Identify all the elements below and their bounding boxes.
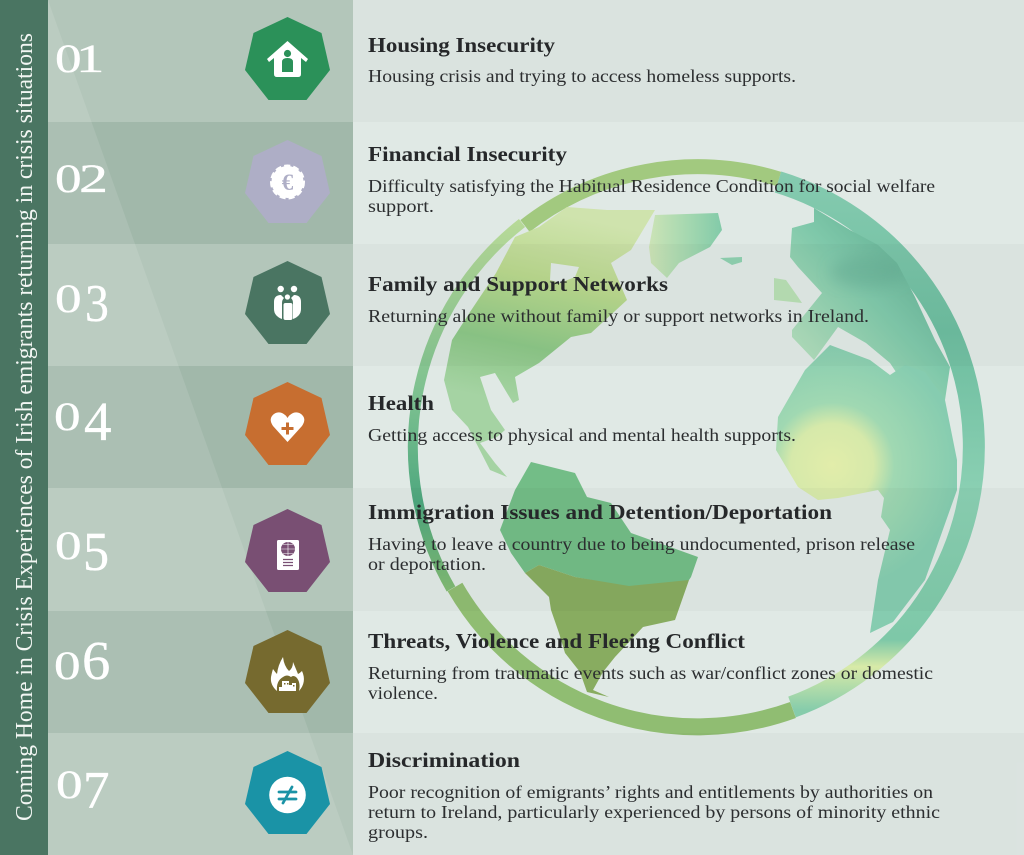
row 04: number xyxy=(54,391,112,452)
panel: left number column xyxy=(48,0,353,855)
globe ring: top arc xyxy=(525,167,779,226)
sidebar title xyxy=(0,0,48,855)
globe ring: bottom arc xyxy=(455,587,793,727)
row 01: number: 0 xyxy=(55,37,82,81)
sidebar title: Coming Home in Crisis Experiences of Irish emigrants returning in crisis situations xyxy=(12,33,38,821)
row 07: text xyxy=(368,748,940,842)
row 04: number: 4 xyxy=(84,391,112,452)
row 02: number: 0 xyxy=(55,157,82,201)
row 07: text: Poor recognition of emigrants’ rights and entitlements by authorities on xyxy=(368,782,933,802)
globe ring: right arc xyxy=(778,182,974,707)
island: Iceland xyxy=(720,257,742,265)
row 05: number: 5 xyxy=(83,521,109,582)
row 03: number: 0 xyxy=(55,277,82,321)
row 04: number: 0 xyxy=(54,395,81,439)
row 07: number: 0 xyxy=(56,763,83,807)
row 01: text: Housing Insecurity xyxy=(368,33,556,57)
row 02: icon financial xyxy=(245,140,330,223)
Hudson Bay xyxy=(550,263,579,283)
row 07: text: Discrimination xyxy=(368,748,520,772)
continent: Greenland xyxy=(649,213,722,278)
row 01: number: 1 xyxy=(76,36,104,81)
row 01: text xyxy=(368,33,796,86)
row 07: text: groups. xyxy=(368,822,428,842)
row 05: text: Having to leave a country due to being undocumented, prison release xyxy=(368,534,915,554)
row 05: text: Immigration Issues and Detention/Deportation xyxy=(368,500,832,524)
row 04: text xyxy=(368,391,796,445)
globe watercolor illustration xyxy=(413,167,974,727)
panel: right description background xyxy=(353,0,1024,855)
row 02: text xyxy=(368,142,935,216)
row 07: number: 7 xyxy=(83,762,110,820)
row 04: icon health xyxy=(245,382,330,465)
row 02: icon financial: € xyxy=(282,170,294,195)
row 03: icon family xyxy=(245,261,330,344)
continent: Eurasia xyxy=(790,208,950,400)
row 07: icon discrimination xyxy=(245,751,330,834)
row 06: text: Threats, Violence and Fleeing Conflict xyxy=(368,629,745,653)
row 06: text xyxy=(368,629,933,703)
row 05: icon immigration xyxy=(245,509,330,592)
row 03: text xyxy=(368,272,869,326)
row 02: number: 2 xyxy=(79,157,108,201)
panel: shaded bands for odd rows xyxy=(353,0,1024,855)
row 06: text: violence. xyxy=(368,683,438,703)
row 03: text: Returning alone without family or support networks in Ireland. xyxy=(368,306,869,326)
row 06: text: Returning from traumatic events such as war/conflict zones or domestic xyxy=(368,663,933,683)
row 02: text: Difficulty satisfying the Habitual Residence Condition for social welfare xyxy=(368,176,935,196)
row 07: number xyxy=(56,762,110,820)
row 06: icon conflict xyxy=(245,630,330,713)
row 02: text: Financial Insecurity xyxy=(368,142,568,166)
row 01: icon housing xyxy=(245,17,330,100)
row 06: number: 0 xyxy=(54,644,81,688)
row 06: number xyxy=(54,631,110,692)
row 05: text: or deportation. xyxy=(368,554,486,574)
Eurasia dark wash xyxy=(835,261,890,286)
row 07: text: return to Ireland, particularly experienced by persons of minority ethnic xyxy=(368,802,940,822)
globe ring: left arc xyxy=(413,223,522,589)
row 01: number xyxy=(55,36,104,81)
row 02: text: support. xyxy=(368,196,434,216)
row 03: number: 3 xyxy=(85,274,109,333)
continent: South America south xyxy=(525,565,689,697)
row 03: number xyxy=(55,274,109,333)
row 03: text: Family and Support Networks xyxy=(368,272,668,296)
continent: Africa and east xyxy=(776,345,957,633)
row 04: text: Health xyxy=(368,391,434,415)
row 06: number: 6 xyxy=(82,631,110,692)
row 05: number xyxy=(55,521,109,582)
row 05: number: 0 xyxy=(55,524,82,568)
row 04: text: Getting access to physical and mental health supports. xyxy=(368,425,796,445)
island: Britain and Ireland xyxy=(774,278,802,303)
continent: South America north xyxy=(500,462,698,587)
row 01: text: Housing crisis and trying to access homeless supports. xyxy=(368,66,796,86)
row 02: number xyxy=(55,157,108,201)
row 05: text xyxy=(368,500,915,574)
continent: North America xyxy=(444,207,655,477)
